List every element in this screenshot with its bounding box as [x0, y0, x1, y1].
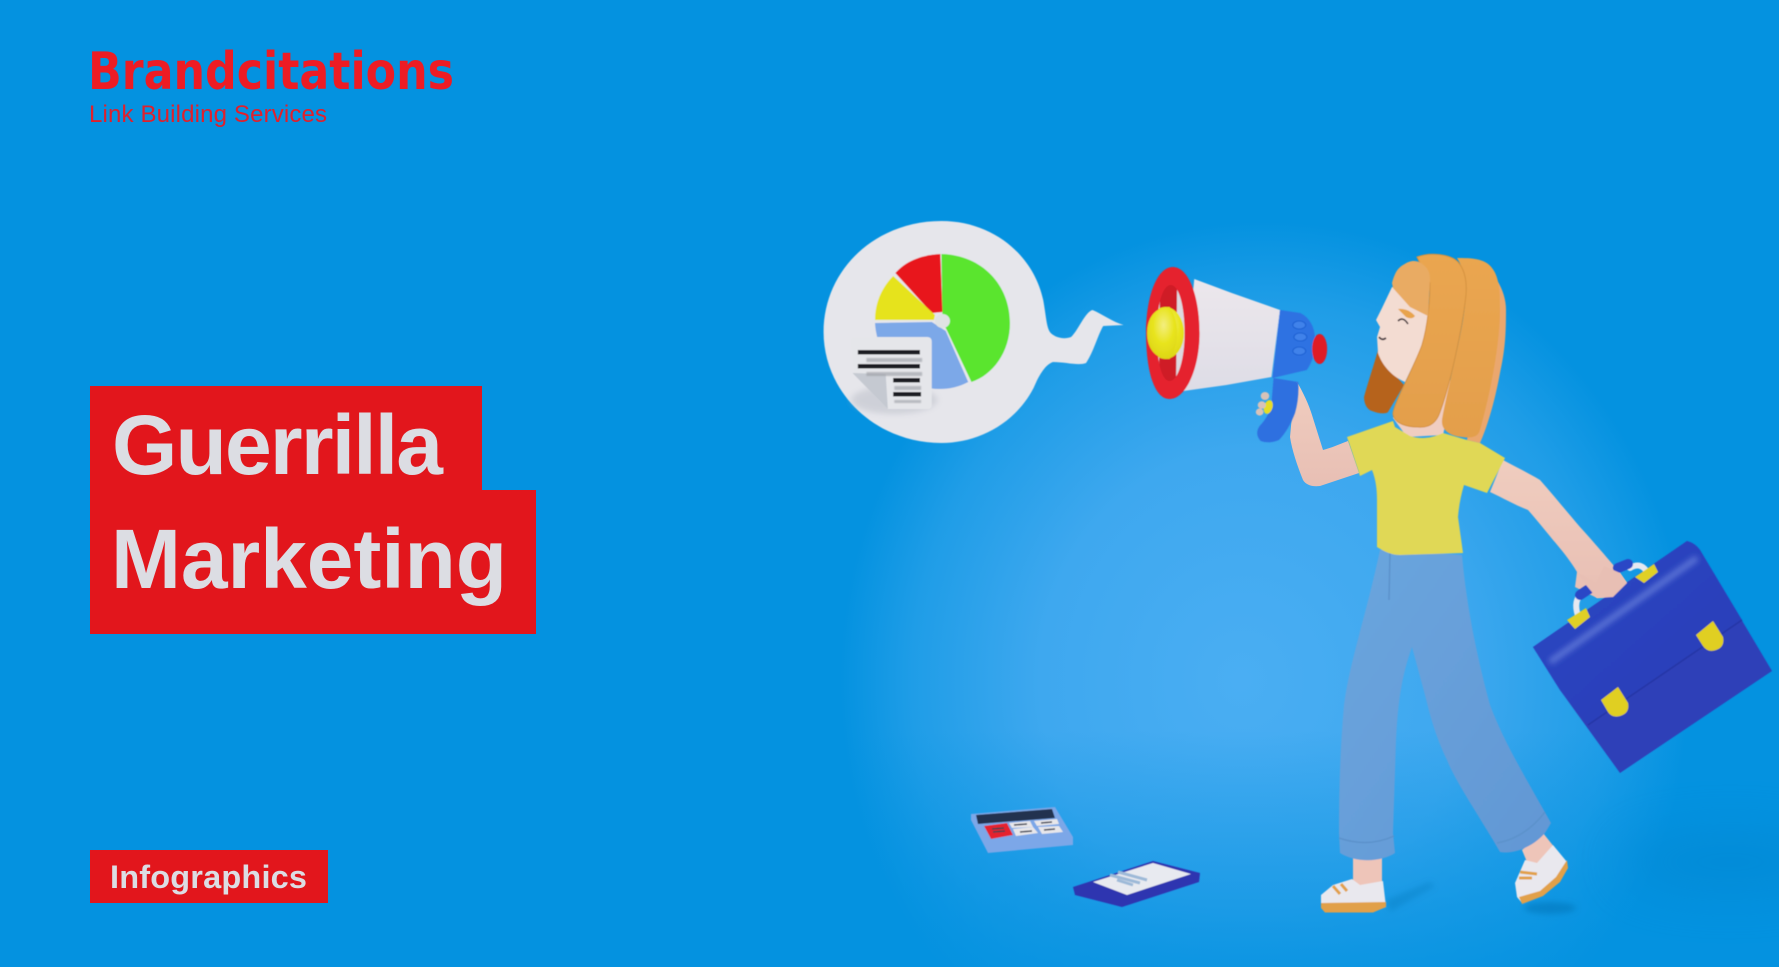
phone lines	[1110, 872, 1147, 885]
title line 1: Guerrilla	[112, 398, 444, 492]
megaphone ball overlap	[1147, 307, 1177, 359]
title red background	[90, 386, 536, 634]
face	[1376, 287, 1430, 382]
briefcase flap	[1533, 541, 1742, 725]
trousers	[1339, 550, 1551, 860]
smartphone	[1073, 861, 1200, 907]
bubble shape with tail	[824, 221, 1124, 443]
hair back	[1364, 350, 1404, 413]
calculator	[971, 807, 1073, 853]
document icon	[850, 337, 937, 414]
t-shirt	[1347, 421, 1505, 555]
megaphone cone	[1184, 279, 1280, 391]
eye	[1398, 319, 1408, 324]
megaphone button	[1312, 334, 1327, 364]
pie slice: green	[941, 254, 1010, 382]
megaphone trigger and fingers	[1256, 392, 1274, 416]
hair strand left	[1393, 254, 1466, 427]
hair strand right	[1442, 258, 1500, 437]
calculator keys	[1009, 819, 1063, 836]
briefcase highlight	[1550, 558, 1697, 662]
logo tagline: Link Building Services	[89, 101, 327, 128]
pie hub	[935, 314, 950, 328]
briefcase handle mounts	[1567, 608, 1590, 629]
briefcase rear latch	[1696, 621, 1723, 651]
calculator red key	[984, 823, 1013, 839]
hair fringe	[1392, 261, 1430, 316]
megaphone	[1146, 267, 1327, 442]
megaphone collar ridges	[1293, 321, 1307, 355]
title block	[90, 386, 536, 634]
hair rear sliver	[1467, 280, 1506, 443]
briefcase body	[1533, 541, 1772, 773]
megaphone ring front	[1146, 267, 1200, 399]
briefcase flap edge	[1588, 620, 1742, 725]
pie slice: red	[895, 254, 942, 313]
logo wordmark: Brandcitations	[88, 42, 454, 102]
pie slice: yellow	[875, 276, 935, 320]
speech bubble with pie chart	[824, 221, 1124, 443]
left shoe	[1321, 879, 1386, 912]
megaphone collar	[1272, 310, 1315, 378]
title line 2: Marketing	[111, 512, 507, 606]
character	[1321, 254, 1627, 914]
back leg ankle	[1353, 855, 1382, 886]
briefcase front latch	[1601, 687, 1628, 716]
trouser fold lines	[1339, 552, 1545, 843]
megaphone ring back	[1147, 278, 1194, 388]
eyebrow	[1398, 309, 1415, 318]
briefcase handle	[1576, 564, 1648, 616]
logo: Brandcitations	[88, 42, 454, 128]
pie slice: blue	[875, 322, 968, 389]
megaphone ball	[1147, 307, 1184, 359]
front leg ankle	[1522, 833, 1555, 866]
megaphone grip	[1257, 378, 1298, 442]
briefcase	[1533, 541, 1772, 773]
calculator screen	[976, 809, 1055, 824]
phone screen	[1093, 863, 1191, 895]
mouth	[1379, 337, 1386, 339]
hand over handle	[1577, 566, 1627, 598]
raised arm	[1290, 382, 1359, 486]
carrying arm and hand	[1490, 460, 1627, 598]
tag: Infographics: Infographics	[110, 859, 307, 895]
foot shadows	[1386, 882, 1576, 914]
tag: Infographics	[90, 850, 328, 903]
neck	[1393, 380, 1455, 437]
right shoe	[1515, 845, 1568, 904]
